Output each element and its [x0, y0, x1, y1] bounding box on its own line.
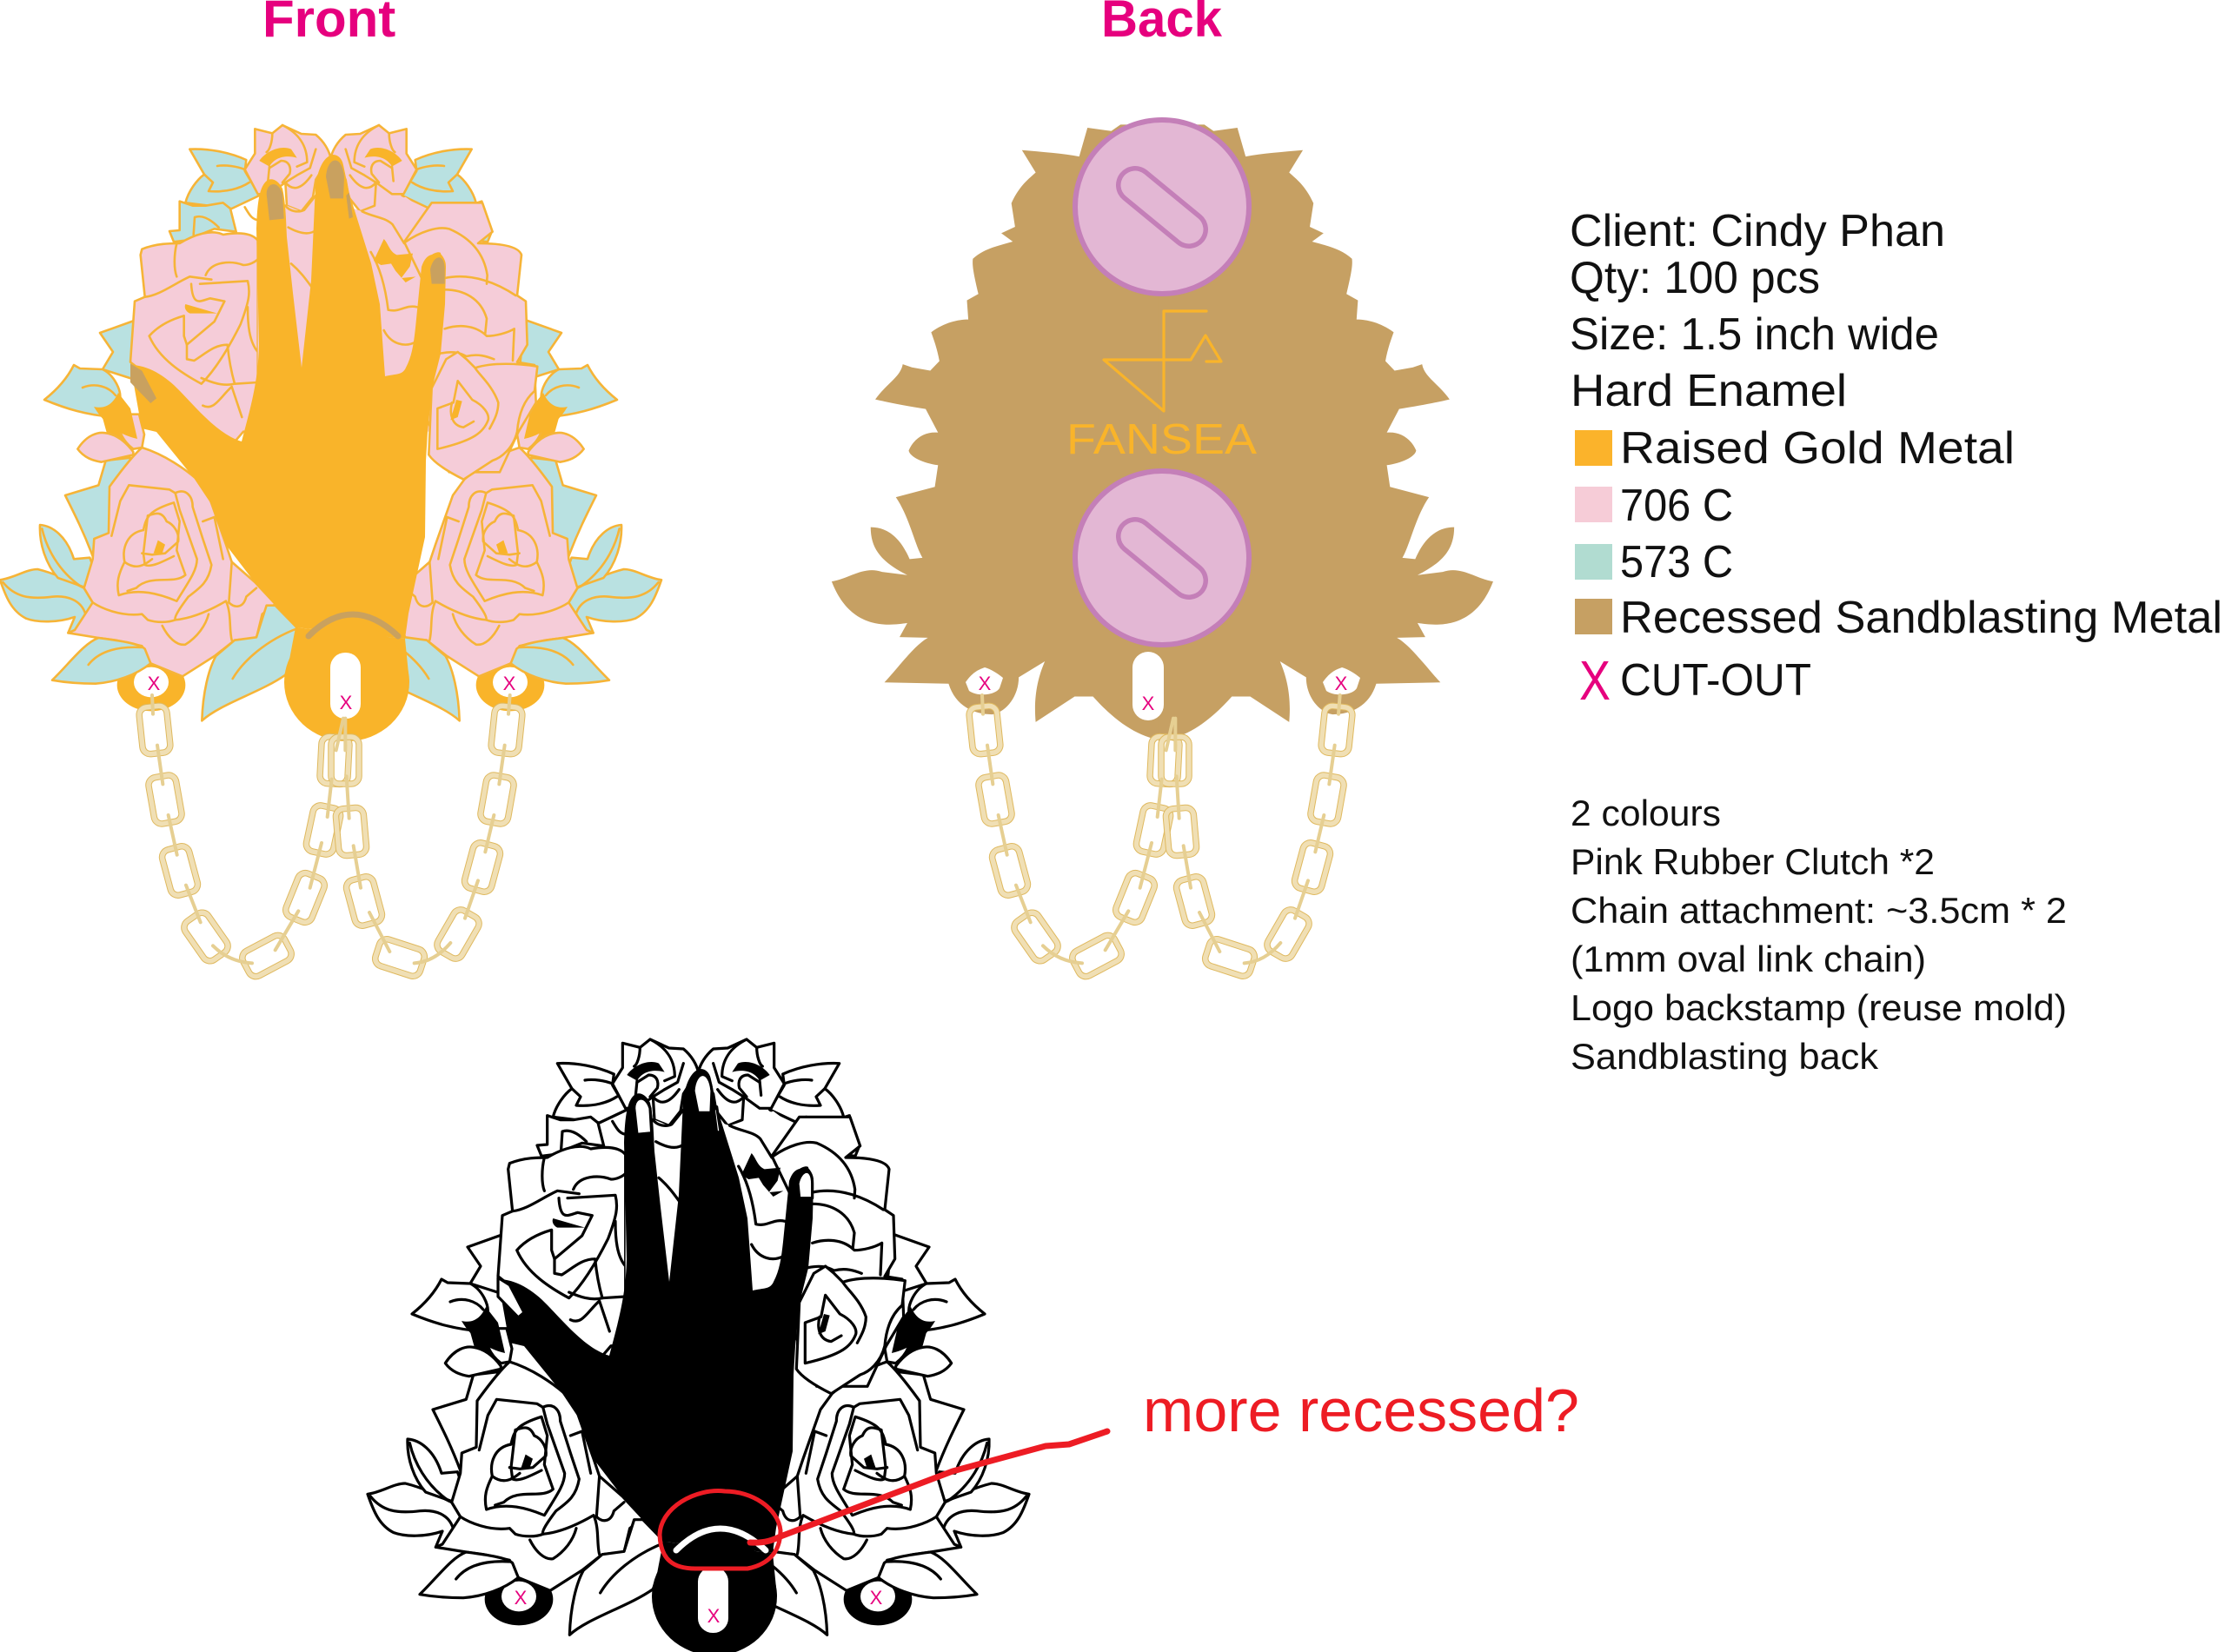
- front chains: [138, 695, 523, 979]
- legend: 706 C: [1575, 481, 1733, 531]
- red annotation circle: [660, 1491, 780, 1569]
- note: chain type: (1mm oval link chain): [1571, 939, 1926, 979]
- note: logo: Logo backstamp (reuse mold): [1571, 987, 2067, 1028]
- spec text block: [1570, 206, 2222, 1077]
- legend: 573 C: 573 C: [1620, 537, 1733, 587]
- legend: 706 C: 706 C: [1620, 481, 1733, 531]
- red annotation arrow line: [750, 1431, 1107, 1543]
- legend: raised gold metal: Raised Gold Metal: [1620, 423, 2015, 474]
- line art cut-out marks: [515, 1587, 883, 1627]
- pin artwork: hand and roses in enamel colours: [0, 125, 661, 741]
- note: colours: 2 colours: [1571, 793, 1721, 833]
- cut-out marks: X: [503, 673, 516, 694]
- legend: recessed sandblasting metal: Recessed Sandblasting Metal: [1620, 593, 2222, 643]
- logo mark: [1104, 311, 1221, 411]
- cut-out marks: [148, 673, 516, 713]
- logo wordmark: FANSEA: [1066, 416, 1257, 463]
- back cut-out marks: X: [979, 673, 992, 694]
- cut-out marks: X: [340, 692, 353, 713]
- cut-out marks: X: [148, 673, 161, 694]
- line art cut-out marks: X: [707, 1605, 721, 1627]
- enamel type: Hard Enamel: [1571, 366, 1847, 416]
- line art: [368, 1039, 1029, 1652]
- back cut-out marks: X: [1142, 693, 1155, 714]
- back chains: [968, 695, 1353, 979]
- back cut-out marks: X: [1335, 673, 1348, 694]
- note: sandblasting: Sandblasting back: [1571, 1036, 1879, 1077]
- note: clutch: Pink Rubber Clutch *2: [1571, 841, 1935, 882]
- back silhouette sandblasted metal: [832, 124, 1493, 741]
- line art cut-out marks: X: [870, 1587, 883, 1609]
- size: Size: 1.5 inch wide: [1570, 309, 1939, 360]
- annotation text: more recessed?: [1143, 1377, 1579, 1444]
- front pin design: [0, 125, 661, 741]
- note: chain: Chain attachment: ~3.5cm * 2: [1571, 890, 2067, 931]
- back cut-out marks: [979, 673, 1348, 714]
- legend: cut-out: [1579, 649, 1811, 712]
- client: Client: Cindy Phan: [1570, 206, 1945, 256]
- quantity: Qty: 100 pcs: [1570, 253, 1820, 303]
- clutch top: [1075, 120, 1249, 294]
- legend: 573 C: [1575, 537, 1733, 587]
- line art cut-out marks: X: [515, 1587, 528, 1609]
- legend: cut-out: X: [1579, 649, 1611, 712]
- legend: cut-out: CUT-OUT: [1620, 655, 1811, 706]
- back pin design: [832, 120, 1493, 741]
- clutch bottom: [1075, 471, 1249, 645]
- cut-outs on back: [966, 652, 1360, 720]
- black and white line art pin: [368, 1039, 1029, 1652]
